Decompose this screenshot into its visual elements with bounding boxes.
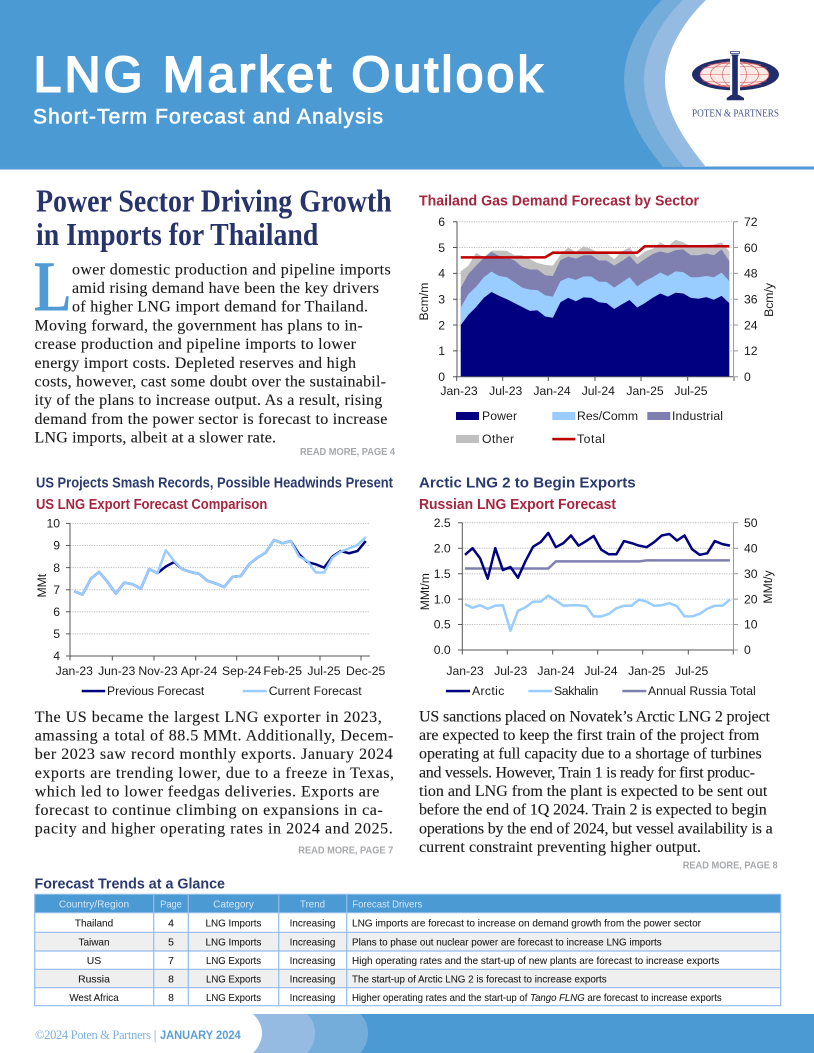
text block: Thailand article: LNG imports, albeit at a slower rate. [34, 430, 276, 447]
legend: Current Forecast [269, 684, 362, 698]
row: Taiwan: LNG Imports [206, 938, 262, 948]
icon: Poten & Partners logo [692, 52, 779, 120]
heading: forecast trends table: Forecast Trends at a Glance [34, 876, 225, 892]
row: Russia: 8 [168, 975, 174, 986]
line chart: US LNG exports: Jul-25 [307, 664, 341, 678]
legend [82, 684, 362, 698]
table header row: Country/Region [59, 900, 129, 911]
table header row: Trend [300, 900, 325, 911]
area chart: Thailand gas demand: 2 [438, 318, 445, 332]
row: US: Increasing [290, 956, 336, 967]
table header row: Category [213, 900, 255, 911]
legend: Total [577, 432, 605, 446]
axes [453, 222, 734, 381]
footer copyright: JANUARY 2024 [160, 1028, 241, 1042]
line chart: Russian LNG exports: 1.5 [434, 567, 451, 581]
text block: Thailand article: L [34, 247, 71, 327]
area chart: Thailand gas demand: 72 [744, 215, 758, 229]
row: US [87, 956, 719, 967]
row: Russia: Increasing [290, 975, 336, 986]
area chart: Thailand gas demand: 4 [438, 267, 445, 281]
area chart: Thailand gas demand: Bcm/m [417, 283, 431, 320]
line chart: US LNG exports: MMt [35, 573, 49, 598]
text block: Thailand article: crease production and pipeline imports to lower [34, 336, 357, 353]
row: Taiwan: Increasing [290, 938, 336, 948]
area chart: Thailand gas demand: 12 [744, 344, 758, 358]
area chart: Thailand gas demand: Jan-23 [440, 384, 478, 398]
area chart: Thailand gas demand: Jan-24 [533, 384, 571, 398]
read more link: page 4: READ MORE, PAGE 4 [300, 447, 395, 458]
area chart: Thailand gas demand [417, 215, 776, 446]
text block: Thailand article: amid rising demand have been the key drivers [72, 280, 379, 297]
line chart: Russian LNG exports: 2.0 [434, 541, 451, 555]
table header row: Page [160, 900, 182, 911]
title: LNG Market Outlook [34, 46, 544, 102]
legend: Annual Russia Total [648, 684, 756, 698]
legend [446, 684, 756, 698]
row: Thailand: 4 [168, 919, 174, 930]
legend: Res/Comm [577, 409, 638, 423]
footer copyright [35, 1028, 241, 1042]
row: Taiwan: 5 [168, 938, 174, 948]
line chart: US LNG exports: 5 [53, 627, 60, 641]
text block: Thailand article: Moving forward, the government has plans to in- [34, 317, 363, 334]
text block: Thailand article: ower domestic production and pipeline imports [72, 261, 391, 278]
line chart: Russian LNG exports: Jan-23 [446, 664, 484, 678]
text block: US article: forecast to continue climbing on expansions in ca- [35, 802, 383, 819]
row: Russia [78, 975, 607, 986]
row: West Africa: West Africa [69, 993, 119, 1004]
row: West Africa: Higher operating rates and the start-up of Tango FLNG are forecast to increase exports [352, 993, 722, 1004]
header banner [0, 0, 814, 170]
legend: Power [482, 409, 517, 423]
line chart: Russian LNG exports: MMt/y [761, 570, 775, 604]
line chart: US LNG exports: Dec-25 [346, 664, 386, 678]
text block: US article [35, 709, 394, 838]
line chart: Russian LNG exports: 0 [744, 643, 751, 657]
text block: Thailand article: of higher LNG import demand for Thailand. [72, 299, 368, 316]
area chart: Thailand gas demand: 36 [744, 292, 758, 306]
text block: US article: exports are trending lower, due to a freeze in Texas, [35, 765, 394, 782]
line chart: Russian LNG exports: 10 [744, 618, 758, 632]
line chart: US LNG exports: Jan-23 [56, 664, 93, 678]
legend: Industrial [672, 409, 723, 423]
area chart: Thailand gas demand: 48 [744, 267, 758, 281]
text block: Arctic article: and vessels. However, Train 1 is ready for first produc- [419, 764, 755, 781]
text block: Thailand article: ity of the plans to increase output. As a result, rising [34, 392, 382, 409]
row: West Africa [69, 993, 722, 1004]
legend: Sakhalin [554, 684, 598, 698]
text block: Arctic article: operating at full capacity due to a shortage of turbines [419, 746, 762, 763]
area chart: Thailand gas demand: Jul-24 [582, 384, 615, 398]
line chart: Russian LNG exports: 0.0 [434, 643, 451, 657]
text block: Arctic article: current constraint preventing higher output. [419, 839, 701, 856]
line chart: Russian LNG exports: Jul-25 [675, 664, 709, 678]
text block: Thailand article [34, 247, 391, 447]
line chart: US LNG exports: 9 [53, 539, 60, 553]
area chart: Thailand gas demand: 1 [438, 344, 445, 358]
row: West Africa: 8 [168, 993, 174, 1004]
line chart: Russian LNG exports: Jul-24 [584, 664, 618, 678]
line chart: Russian LNG exports: MMt/m [418, 573, 432, 610]
area chart: Thailand gas demand: Jul-25 [674, 384, 708, 398]
row: Taiwan [78, 938, 662, 948]
text block: Arctic article [419, 708, 773, 856]
line chart: Russian LNG exports: 0.5 [434, 618, 451, 632]
table header row [59, 900, 422, 911]
line chart: Russian LNG exports: 30 [744, 567, 758, 581]
area chart: Thailand gas demand: Bcm/y [762, 282, 776, 317]
area chart: Thailand gas demand: Jan-25 [626, 384, 664, 398]
footer copyright: ©2024 Poten & Partners [35, 1028, 151, 1042]
line chart: US LNG exports [35, 517, 386, 698]
text block: Thailand article: costs, however, cast some doubt over the sustainabil- [34, 374, 386, 390]
row: Russia: The start-up of Arctic LNG 2 is forecast to increase exports [352, 975, 607, 986]
text block: US article: pacity and higher operating rates in 2024 and 2025. [35, 821, 393, 838]
line chart: US LNG exports: Jun-23 [98, 664, 136, 678]
line chart: Russian LNG exports: 40 [744, 541, 758, 555]
line chart: Russian LNG exports: 1.0 [434, 592, 451, 606]
area chart: Thailand gas demand: 3 [438, 292, 445, 306]
chart heading: Russia: Russian LNG Export Forecast [419, 497, 616, 513]
text block: Arctic article: are expected to keep the first train of the project from [419, 727, 760, 744]
line chart: Russian LNG exports: Jan-25 [628, 664, 666, 678]
legend [456, 409, 723, 446]
icon: Poten & Partners logo: POTEN & PARTNERS [692, 109, 779, 120]
text block: Arctic article: before the end of 1Q 2024. Train 2 is expected to begin [419, 802, 767, 819]
heading: Thailand article: Power Sector Driving Growth [36, 184, 392, 219]
line chart: US LNG exports: 4 [53, 649, 60, 663]
legend: Arctic [472, 684, 504, 698]
row: West Africa: LNG Exports [206, 993, 261, 1004]
area chart: Thailand gas demand: 5 [438, 241, 445, 255]
text block: US article: ber 2023 saw record monthly exports. January 2024 [35, 746, 393, 763]
text block: Arctic article: tion and LNG from the plant is expected to be sent out [419, 783, 768, 800]
table: forecast trends [35, 894, 781, 1006]
legend: Other [482, 432, 514, 446]
line chart: US LNG exports: Feb-25 [263, 664, 302, 678]
chart heading: US: US LNG Export Forecast Comparison [36, 497, 267, 513]
row: West Africa: Increasing [290, 993, 336, 1004]
line chart: US LNG exports: 10 [46, 517, 60, 531]
text block: Thailand article: energy import costs. Depleted reserves and high [34, 355, 356, 372]
area chart: Thailand gas demand: 60 [744, 241, 758, 255]
stacked areas [461, 240, 729, 377]
line chart: US LNG exports: 6 [53, 605, 60, 619]
text block: US article: amassing a total of 88.5 MMt. Additionally, Decem- [35, 728, 393, 745]
area chart: Thailand gas demand: Jul-23 [489, 384, 523, 398]
line chart: Russian LNG exports: Jan-24 [537, 664, 575, 678]
row: US: LNG Exports [206, 956, 261, 967]
text block: Arctic article: operations by the end of 2024, but vessel availability is a [419, 820, 773, 837]
read more link: page 8: READ MORE, PAGE 8 [683, 860, 778, 871]
line chart: US LNG exports: Sep-24 [222, 664, 262, 678]
row: US: 7 [168, 956, 174, 967]
row: Thailand [75, 919, 702, 930]
row: Thailand: LNG Imports [206, 919, 262, 930]
read more link: page 7: READ MORE, PAGE 7 [298, 845, 393, 856]
row: Russia: Russia [78, 975, 110, 986]
heading: US article: US Projects Smash Records, Possible Headwinds Present [36, 476, 393, 492]
heading: Arctic article: Arctic LNG 2 to Begin Exports [419, 476, 636, 492]
legend: Previous Forecast [107, 684, 205, 698]
row: US: US [87, 956, 101, 967]
row: Taiwan: Plans to phase out nuclear power are forecast to increase LNG imports [352, 938, 662, 948]
row: Taiwan: Taiwan [78, 938, 110, 948]
heading: Thailand article: in Imports for Thailand [36, 217, 319, 252]
text block: US article: The US became the largest LNG exporter in 2023, [35, 709, 382, 726]
line chart: US LNG exports: 7 [53, 583, 60, 597]
line chart: Russian LNG exports: 2.5 [434, 516, 451, 530]
text block: US article: which led to lower feedgas deliveries. Exports are [35, 783, 379, 800]
area chart: Thailand gas demand: 0 [744, 370, 751, 384]
row: Thailand: Thailand [75, 919, 113, 930]
area chart: Thailand gas demand: 0 [438, 370, 445, 384]
line chart: Russian LNG exports: 20 [744, 592, 758, 606]
heading: Thailand article [36, 184, 392, 252]
line chart: Russian LNG exports: 50 [744, 516, 758, 530]
chart heading: Thailand: Thailand Gas Demand Forecast by Sector [419, 194, 699, 210]
area chart: Thailand gas demand: 24 [744, 318, 758, 332]
line chart: US LNG exports: Apr-24 [181, 664, 218, 678]
footer band [253, 1014, 814, 1053]
table header row: Forecast Drivers [352, 900, 422, 911]
line chart: Russian LNG exports: Jul-23 [494, 664, 528, 678]
area chart: Thailand gas demand: 6 [438, 215, 445, 229]
subtitle: Short-Term Forecast and Analysis [33, 106, 383, 129]
line chart: US LNG exports: Nov-23 [138, 664, 178, 678]
row: US: High operating rates and the start-up of new plants are forecast to increase exports [352, 956, 719, 967]
row: Russia: LNG Exports [206, 975, 261, 986]
text block: Thailand article: demand from the power sector is forecast to increase [34, 411, 387, 428]
row: Thailand: Increasing [290, 919, 336, 930]
line chart: US LNG exports: 8 [53, 561, 60, 575]
text block: Arctic article: US sanctions placed on Novatek’s Arctic LNG 2 project [419, 708, 771, 725]
line chart: Russian LNG exports [418, 516, 775, 698]
row: Thailand: LNG imports are forecast to increase on demand growth from the power sector [352, 919, 702, 930]
